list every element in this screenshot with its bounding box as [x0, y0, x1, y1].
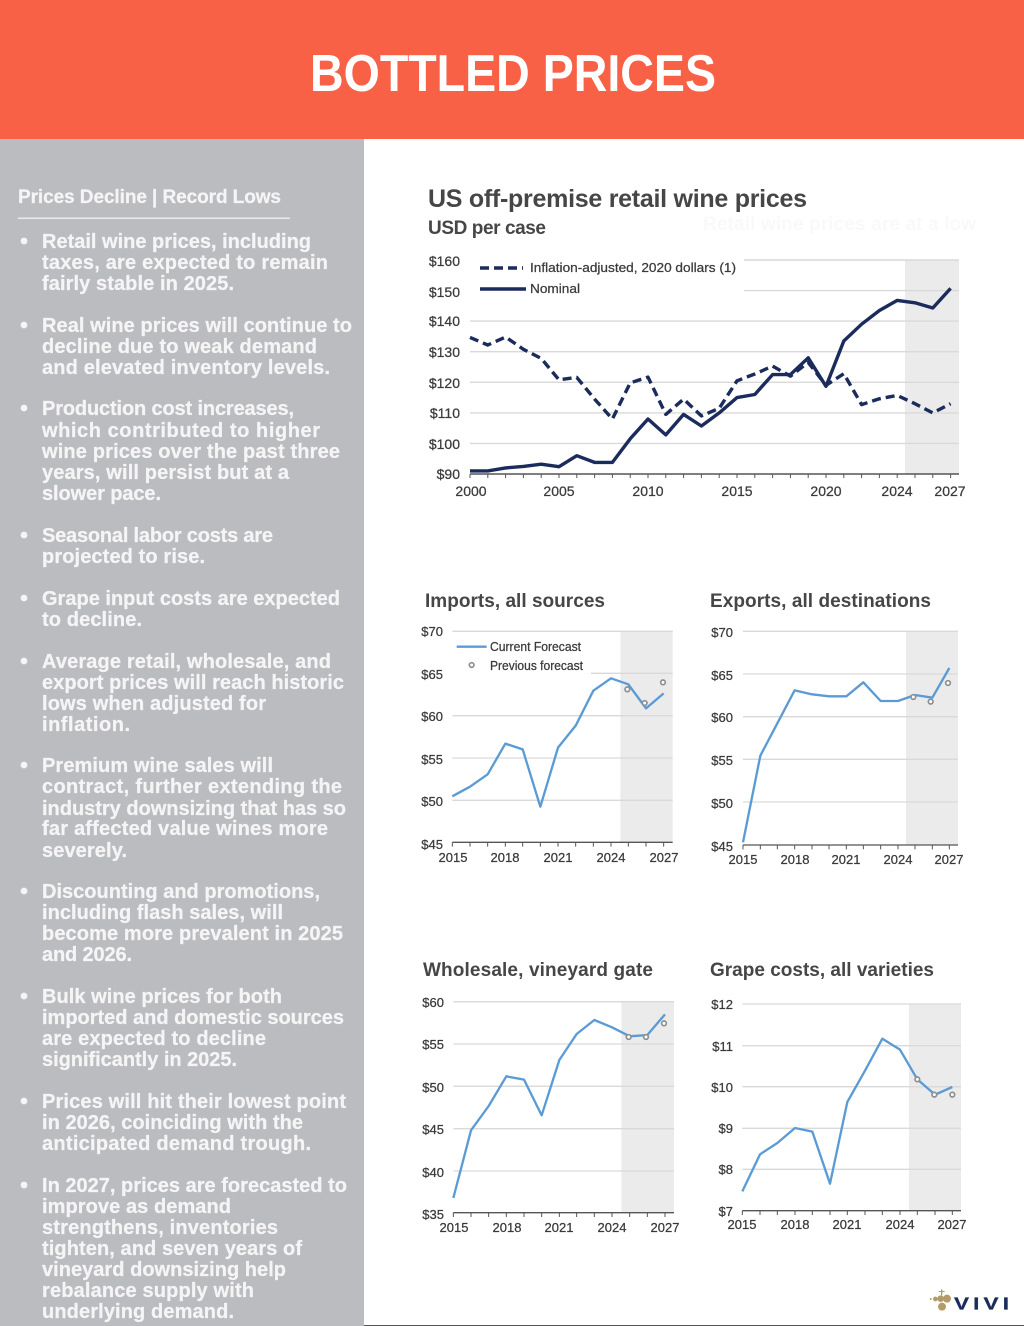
- bullet: production cost: [21, 398, 340, 505]
- wholesale heading: Wholesale, vineyard gate: [423, 960, 653, 981]
- bullet: average prices: Average retail, wholesale, and: [42, 651, 331, 673]
- logo: VIVI: VIVI: [954, 1294, 1009, 1314]
- faint hidden caption: Retail wine prices are at a low: [703, 214, 976, 235]
- bullet: seasonal labor: [21, 525, 273, 568]
- panel: sidebar: [0, 139, 364, 1326]
- bullet: premium sales: industry downsizing that has so: [42, 798, 346, 820]
- chart: imports: 2015: [439, 850, 467, 865]
- chart: US off-premise retail wine prices: $120: [429, 375, 460, 391]
- bullet: bulk wine: imported and domestic sources: [42, 1007, 344, 1029]
- chart: grape costs: $10: [711, 1080, 733, 1095]
- chart: exports: $55: [711, 753, 733, 768]
- line: inflation-adjusted: [470, 337, 951, 419]
- chart: exports: $50: [711, 796, 733, 811]
- legend: [490, 640, 583, 673]
- bullet: bulk wine: [21, 986, 344, 1071]
- chart: imports: $45: [421, 837, 443, 852]
- chart: grape costs: $11: [712, 1039, 733, 1054]
- main chart heading: US off-premise retail wine prices: [428, 185, 807, 213]
- bullet: lowest point: Prices will hit their lowest point: [42, 1091, 346, 1113]
- chart: US off-premise retail wine prices: 2010: [632, 483, 664, 499]
- bullet: production cost: wine prices over the past three: [41, 441, 340, 463]
- bullet: 2027 recovery: rebalance supply with: [42, 1280, 254, 1302]
- chart: US off-premise retail wine prices: $100: [429, 436, 460, 452]
- logo: VIVI: [930, 1289, 1009, 1314]
- legend: Nominal: [530, 281, 580, 296]
- bullet: production cost: slower pace.: [42, 483, 161, 505]
- legend: Inflation-adjusted, 2020 dollars (1): [530, 260, 736, 275]
- chart: US off-premise retail wine prices: $110: [430, 405, 460, 421]
- chart: wholesale: [422, 995, 679, 1235]
- chart: imports: 2024: [597, 850, 625, 865]
- chart: grape costs: [711, 997, 966, 1232]
- bullet: grape input: [21, 588, 340, 631]
- bullet: premium sales: contract, further extending the: [42, 776, 342, 798]
- chart: wholesale: $60: [422, 995, 444, 1010]
- chart: grape costs: $9: [719, 1121, 733, 1136]
- main chart subheading: USD per case: [428, 218, 546, 239]
- bullet: lowest point: anticipated demand trough.: [42, 1133, 311, 1155]
- bullet: production cost: Production cost increases,: [42, 398, 294, 420]
- chart: grape costs: 2024: [886, 1217, 914, 1232]
- exports heading: Exports, all destinations: [710, 591, 931, 612]
- bullet: premium sales: severely.: [42, 840, 127, 862]
- chart: exports: 2021: [832, 852, 860, 867]
- chart: wholesale: 2021: [545, 1220, 573, 1235]
- chart: grape costs: $8: [719, 1162, 733, 1177]
- bullet: retail prices: [21, 231, 328, 295]
- chart: imports: 2018: [491, 850, 519, 865]
- bullet: premium sales: Premium wine sales will: [42, 755, 273, 777]
- chart: US off-premise retail wine prices: $90: [437, 466, 460, 482]
- chart: US off-premise retail wine prices: 2024: [881, 483, 913, 499]
- chart: grape costs: 2021: [833, 1217, 861, 1232]
- bullet: average prices: export prices will reach historic: [42, 672, 344, 694]
- chart: imports: $50: [421, 794, 443, 809]
- bullet: grape input: to decline.: [42, 609, 142, 631]
- bullet: seasonal labor: Seasonal labor costs are: [42, 525, 273, 547]
- chart: imports: $55: [421, 752, 443, 767]
- bullet: 2027 recovery: improve as demand: [42, 1196, 231, 1218]
- bullet: grape input: Grape input costs are expected: [42, 588, 340, 610]
- chart: exports: 2027: [935, 852, 963, 867]
- grape costs heading: Grape costs, all varieties: [710, 960, 934, 981]
- chart: wholesale: 2027: [651, 1220, 679, 1235]
- bullet: lowest point: [21, 1091, 346, 1155]
- chart: wholesale: $55: [422, 1037, 444, 1052]
- bullet: production cost: which contributed to higher: [41, 420, 320, 442]
- title: BOTTLED PRICES: [310, 45, 716, 103]
- bullet: real prices: [21, 315, 352, 379]
- chart: grape costs: 2015: [728, 1217, 756, 1232]
- bullet: 2027 recovery: [21, 1175, 347, 1323]
- chart: imports: $70: [421, 624, 443, 639]
- bullet: 2027 recovery: underlying demand.: [42, 1301, 234, 1323]
- chart: wholesale: $40: [422, 1165, 444, 1180]
- bullet: bulk wine: are expected to decline: [42, 1028, 266, 1050]
- chart: grape costs: $7: [719, 1204, 733, 1219]
- chart: US off-premise retail wine prices: $160: [429, 253, 460, 269]
- bullet: retail prices: fairly stable in 2025.: [42, 273, 234, 295]
- bullet: real prices: decline due to weak demand: [42, 336, 317, 358]
- legend: [480, 260, 736, 296]
- bullet: real prices: and elevated inventory levels.: [42, 357, 330, 379]
- chart: US off-premise retail wine prices: $130: [429, 344, 460, 360]
- bullet: 2027 recovery: In 2027, prices are forecasted to: [42, 1175, 347, 1197]
- header banner: [0, 0, 1024, 139]
- bullet: retail prices: taxes, are expected to remain: [42, 252, 328, 274]
- chart: wholesale: $45: [422, 1122, 444, 1137]
- chart: exports: $45: [711, 839, 733, 854]
- chart: wholesale: 2018: [493, 1220, 521, 1235]
- chart: grape costs: $12: [711, 997, 733, 1012]
- chart: exports: $60: [711, 710, 733, 725]
- bullet: seasonal labor: projected to rise.: [42, 546, 205, 568]
- bullet: 2027 recovery: vineyard downsizing help: [42, 1259, 286, 1281]
- chart: exports: 2018: [781, 852, 809, 867]
- chart: US off-premise retail wine prices: 2027: [934, 483, 966, 499]
- bullet: bulk wine: Bulk wine prices for both: [42, 986, 282, 1008]
- imports heading: Imports, all sources: [425, 591, 605, 612]
- bullet: discounting: [21, 881, 343, 966]
- bullet: discounting: and 2026.: [42, 944, 132, 966]
- chart: exports: 2024: [884, 852, 912, 867]
- sidebar heading: Prices Decline | Record Lows: [18, 187, 281, 208]
- chart: US off-premise retail wine prices: $150: [429, 284, 460, 300]
- legend: Current Forecast: [490, 640, 582, 654]
- chart: wholesale: 2024: [598, 1220, 626, 1235]
- bullet: production cost: years, will persist but at a: [42, 462, 290, 484]
- bullet: retail prices: Retail wine prices, including: [42, 231, 311, 253]
- bullet: bulk wine: significantly in 2025.: [42, 1049, 237, 1071]
- chart: US off-premise retail wine prices: $140: [429, 313, 460, 329]
- bullet: 2027 recovery: strengthens, inventories: [42, 1217, 278, 1239]
- chart: wholesale: $50: [422, 1080, 444, 1095]
- bullet: lowest point: in 2026, coinciding with the: [42, 1112, 303, 1134]
- chart: grape costs: 2027: [938, 1217, 966, 1232]
- chart: grape costs: 2018: [781, 1217, 809, 1232]
- bullet: real prices: Real wine prices will continue to: [42, 315, 352, 337]
- chart: exports: $70: [711, 625, 733, 640]
- chart: imports: $60: [421, 709, 443, 724]
- chart: wholesale: $35: [422, 1207, 444, 1222]
- bullet: discounting: including flash sales, will: [42, 902, 283, 924]
- chart: US off-premise retail wine prices: 2005: [543, 483, 575, 499]
- bullet: discounting: Discounting and promotions,: [42, 881, 320, 903]
- chart: imports: 2027: [650, 850, 678, 865]
- chart: exports: $65: [711, 668, 733, 683]
- bullet: average prices: lows when adjusted for: [42, 693, 266, 715]
- bullet: premium sales: far affected value wines more: [42, 818, 328, 840]
- chart: US off-premise retail wine prices: 2015: [721, 483, 753, 499]
- bullet: 2027 recovery: tighten, and seven years of: [42, 1238, 302, 1260]
- bullet: average prices: [21, 651, 344, 736]
- chart: wholesale: 2015: [440, 1220, 468, 1235]
- bullet: average prices: inflation.: [42, 714, 130, 736]
- chart: imports: 2021: [544, 850, 572, 865]
- bullet: premium sales: [21, 755, 346, 862]
- chart: exports: [711, 625, 963, 867]
- chart: exports: 2015: [729, 852, 757, 867]
- chart: imports: [421, 624, 678, 865]
- chart: US off-premise retail wine prices: 2020: [810, 483, 842, 499]
- legend: Previous forecast: [490, 659, 583, 673]
- chart: imports: $65: [421, 667, 443, 682]
- chart: US off-premise retail wine prices: [429, 253, 966, 499]
- line: nominal: [470, 288, 951, 471]
- bullet: discounting: become more prevalent in 2025: [42, 923, 343, 945]
- chart: US off-premise retail wine prices: 2000: [455, 483, 487, 499]
